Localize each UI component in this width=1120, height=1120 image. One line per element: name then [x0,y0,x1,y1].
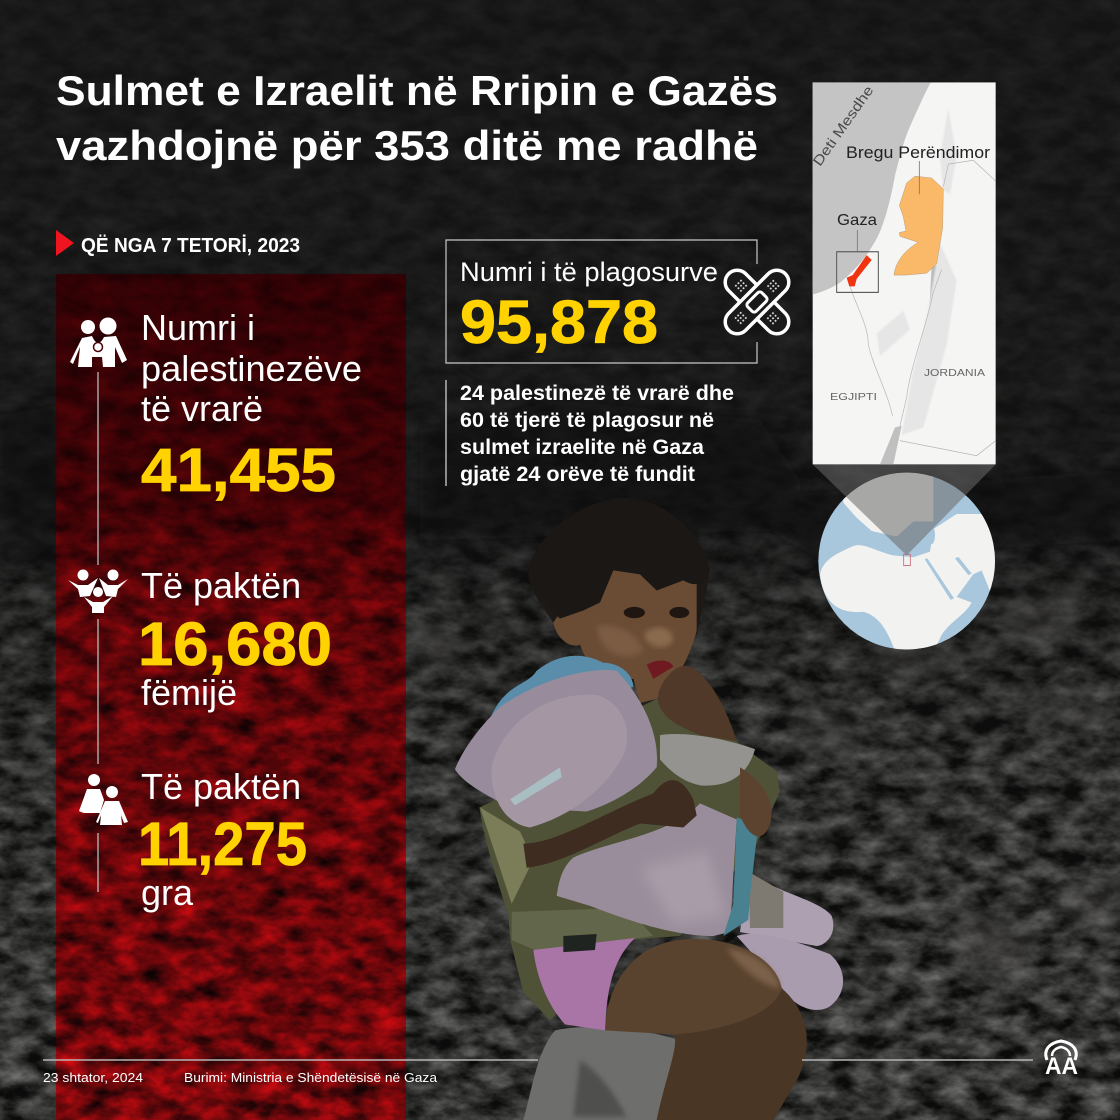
icon: AA logo: AA [1045,1053,1078,1080]
text: label: Të paktën [141,766,301,807]
title: Sulmet e Izraelit në Rripin e Gazës [56,67,778,114]
globe [818,472,995,650]
towel on elephant head [455,670,657,811]
text: label [141,307,362,429]
eyes [624,607,689,618]
legs [657,988,807,1120]
blue yarn [488,656,633,723]
number: 16,680: 16,680 [138,610,332,678]
text block: last 24 hours: gjatë 24 orëve të fundit [460,463,695,486]
west bank [894,176,943,275]
icon: children [68,570,128,613]
text block: last 24 hours: sulmet izraelite në Gaza [460,436,704,459]
footer source: Burimi: Ministria e Shëndetësisë në Gaza [184,1071,437,1085]
text: label: Numri i [141,307,255,348]
icon: bandage [720,265,794,339]
pink shorts [533,938,635,1030]
title: vazhdojnë për 353 ditë me radhë [56,122,758,169]
locator cone [813,464,996,555]
arm and hand [523,780,697,868]
text block: last 24 hours: 24 palestinezë të vrarë dhe [460,382,734,405]
text: label: palestinezëve [141,348,362,389]
gaza box [837,252,878,292]
map: globe and locator [809,82,1000,657]
map labels [809,82,990,403]
text: label: Të paktën [141,565,301,606]
map labels: EGJIPTI [830,392,877,403]
number: 41,455: 41,455 [141,436,336,504]
date heading: QË NGA 7 TETORİ, 2023 [81,234,300,257]
number: 95,878: 95,878 [460,288,658,356]
elephant feet [740,872,833,946]
connector lines [97,372,99,892]
text: label: të vrarë [141,388,263,429]
shirt [479,699,780,1020]
map labels: Bregu Perëndimor [846,143,990,162]
stat: children [68,565,332,713]
stat: women [79,766,307,913]
icon: women [79,774,128,825]
child photo illustration [455,498,843,1120]
text: wounded label: Numri i të plagosurve [460,257,718,287]
face [553,566,697,703]
text block: last 24 hours [446,380,734,486]
elephant head [492,695,627,828]
panel: red stats background [56,274,406,1120]
footer [43,1041,1078,1085]
map labels: JORDANIA [924,368,985,379]
map labels: Deti Mesdhe [809,82,877,169]
hand at mouth [658,666,737,741]
trunk / arm section [660,734,755,786]
text block: last 24 hours: 60 të tjerë të plagosur në [460,409,714,432]
gaza [847,255,872,286]
elephant body [557,803,737,936]
footer date: 23 shtator, 2024 [43,1071,143,1085]
callout: wounded box [446,240,794,363]
number: 11,275: 11,275 [138,810,307,878]
icon: family [70,318,127,367]
map labels: Gaza [837,212,877,229]
text: unit: fëmijë [141,672,237,713]
icon: AA logo [1045,1041,1078,1080]
text: unit: gra [141,872,194,913]
log [523,1027,680,1120]
title [56,67,778,169]
map panel [813,82,996,464]
stat: killed [70,307,362,504]
hair back [528,498,710,635]
teal band [723,817,758,936]
